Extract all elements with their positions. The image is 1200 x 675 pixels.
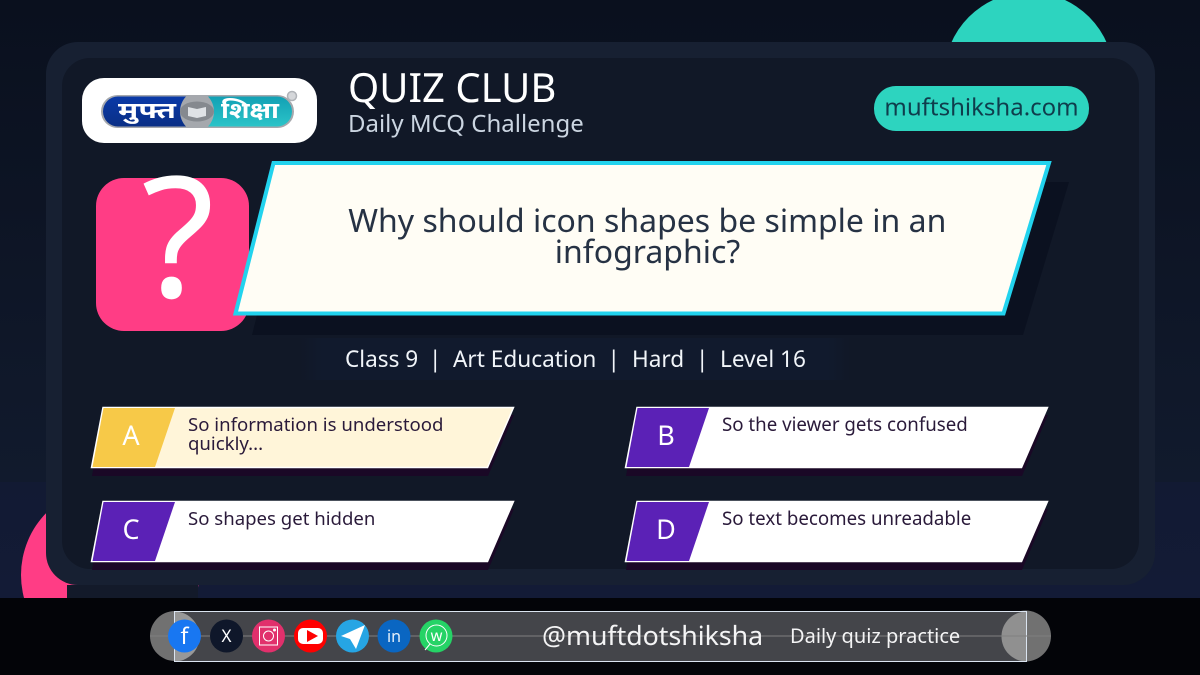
- footer bar: [0, 598, 1200, 675]
- icon: telegram: [336, 620, 369, 652]
- icon: whatsapp: [420, 620, 452, 652]
- icon: linkedin: [378, 620, 410, 652]
- meta strip: Class 9: [345, 343, 418, 374]
- website pill: muftshiksha.com: [884, 90, 1079, 124]
- icon: facebook: [168, 619, 201, 652]
- option D: So text becomes unreadable: [722, 506, 971, 531]
- decorative teal circle: [944, 0, 1114, 162]
- option A: [92, 408, 514, 476]
- meta strip: |: [429, 343, 441, 374]
- logo: [82, 78, 317, 143]
- icon: youtube: [294, 620, 327, 652]
- decorative pink circle: [21, 486, 199, 664]
- icon: x: X: [222, 624, 232, 647]
- option B: So the viewer gets confused: [722, 412, 968, 437]
- subtitle: Daily MCQ Challenge: [348, 107, 584, 140]
- meta strip: Hard: [632, 343, 684, 374]
- option D: [626, 502, 1048, 570]
- question card: [236, 163, 1069, 335]
- option B: B: [657, 416, 675, 453]
- option C: So shapes get hidden: [188, 506, 375, 531]
- meta strip: [300, 338, 850, 380]
- option D: D: [656, 510, 676, 547]
- option A: quickly...: [188, 431, 263, 456]
- option C: [92, 502, 514, 570]
- icon: whatsapp: w: [431, 626, 443, 646]
- question mark badge: [96, 118, 249, 347]
- icon: linkedin: in: [387, 625, 401, 647]
- social handle: @muftdotshiksha: [542, 616, 763, 653]
- meta strip: |: [696, 343, 708, 374]
- option C: C: [122, 510, 140, 547]
- option A: So information is understood: [188, 412, 443, 437]
- icon: instagram: [252, 620, 285, 652]
- title: QUIZ CLUB: [348, 59, 556, 114]
- icon: x: [210, 620, 243, 652]
- question card: Why should icon shapes be simple in an: [348, 199, 946, 242]
- question card: infographic?: [555, 230, 740, 273]
- meta strip: Art Education: [453, 343, 596, 374]
- tagline: Daily quiz practice: [790, 622, 960, 649]
- meta strip: Level 16: [720, 343, 806, 374]
- icon: facebook: f: [181, 619, 190, 651]
- option B: [626, 408, 1048, 476]
- social strip: [150, 610, 1051, 662]
- website pill: [874, 86, 1089, 131]
- lower shadow strip: [67, 585, 198, 598]
- logo: शिक्षा: [221, 95, 280, 125]
- meta strip: |: [608, 343, 620, 374]
- logo: मुफ्त: [118, 95, 177, 125]
- main panel: [46, 42, 1155, 585]
- option A: A: [122, 416, 140, 453]
- question mark badge: ?: [142, 118, 214, 347]
